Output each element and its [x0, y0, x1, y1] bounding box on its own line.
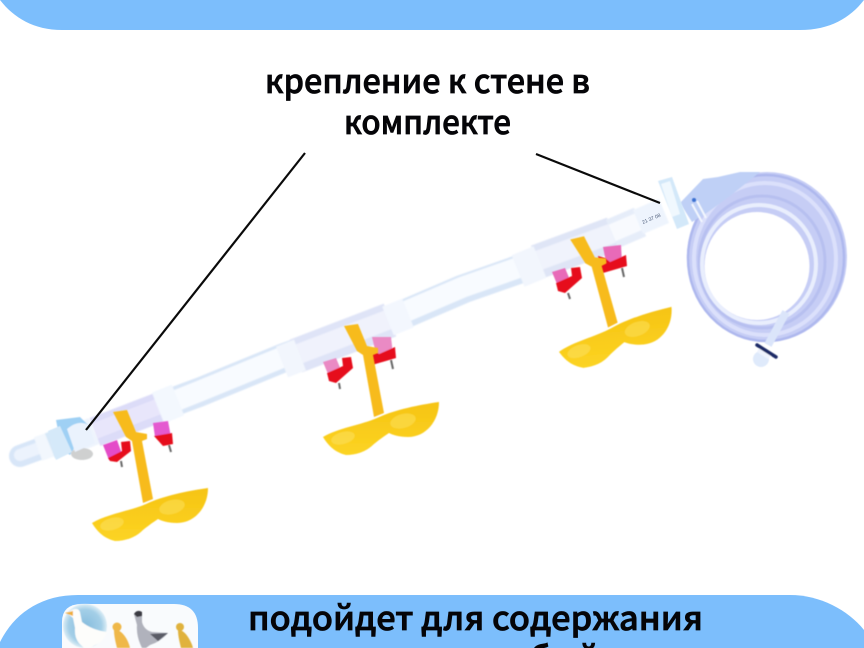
pipe marking: 21 37 08 [641, 213, 662, 226]
callout line left [86, 153, 305, 430]
bottom banner [0, 595, 864, 648]
picture: geese and ducklings [62, 604, 198, 648]
top banner [0, 0, 864, 30]
drinker 3 nipples [552, 245, 627, 299]
coiled hose [680, 172, 847, 345]
product: drinking line [20, 172, 847, 541]
heading: wall mount included [265, 55, 590, 144]
hose end connector [753, 345, 776, 367]
duckling 1 [112, 622, 130, 648]
drinker 2 nipples [323, 337, 396, 389]
drinker 1 [92, 410, 208, 541]
callout line right [536, 154, 660, 203]
drinker 1 nipples [103, 421, 173, 467]
drinker 3 [549, 229, 676, 370]
grey goose [134, 611, 168, 648]
white goose [67, 609, 107, 648]
heading: wall mount included: комплекте [344, 96, 511, 144]
pipe [20, 211, 664, 456]
bottom text: подойдет для содержания [248, 592, 703, 640]
wall flange [658, 177, 696, 229]
left clamp [48, 417, 95, 460]
drinker 2 [323, 324, 439, 455]
duckling 2 [176, 623, 193, 648]
heading: wall mount included: крепление к стене в [265, 55, 590, 103]
